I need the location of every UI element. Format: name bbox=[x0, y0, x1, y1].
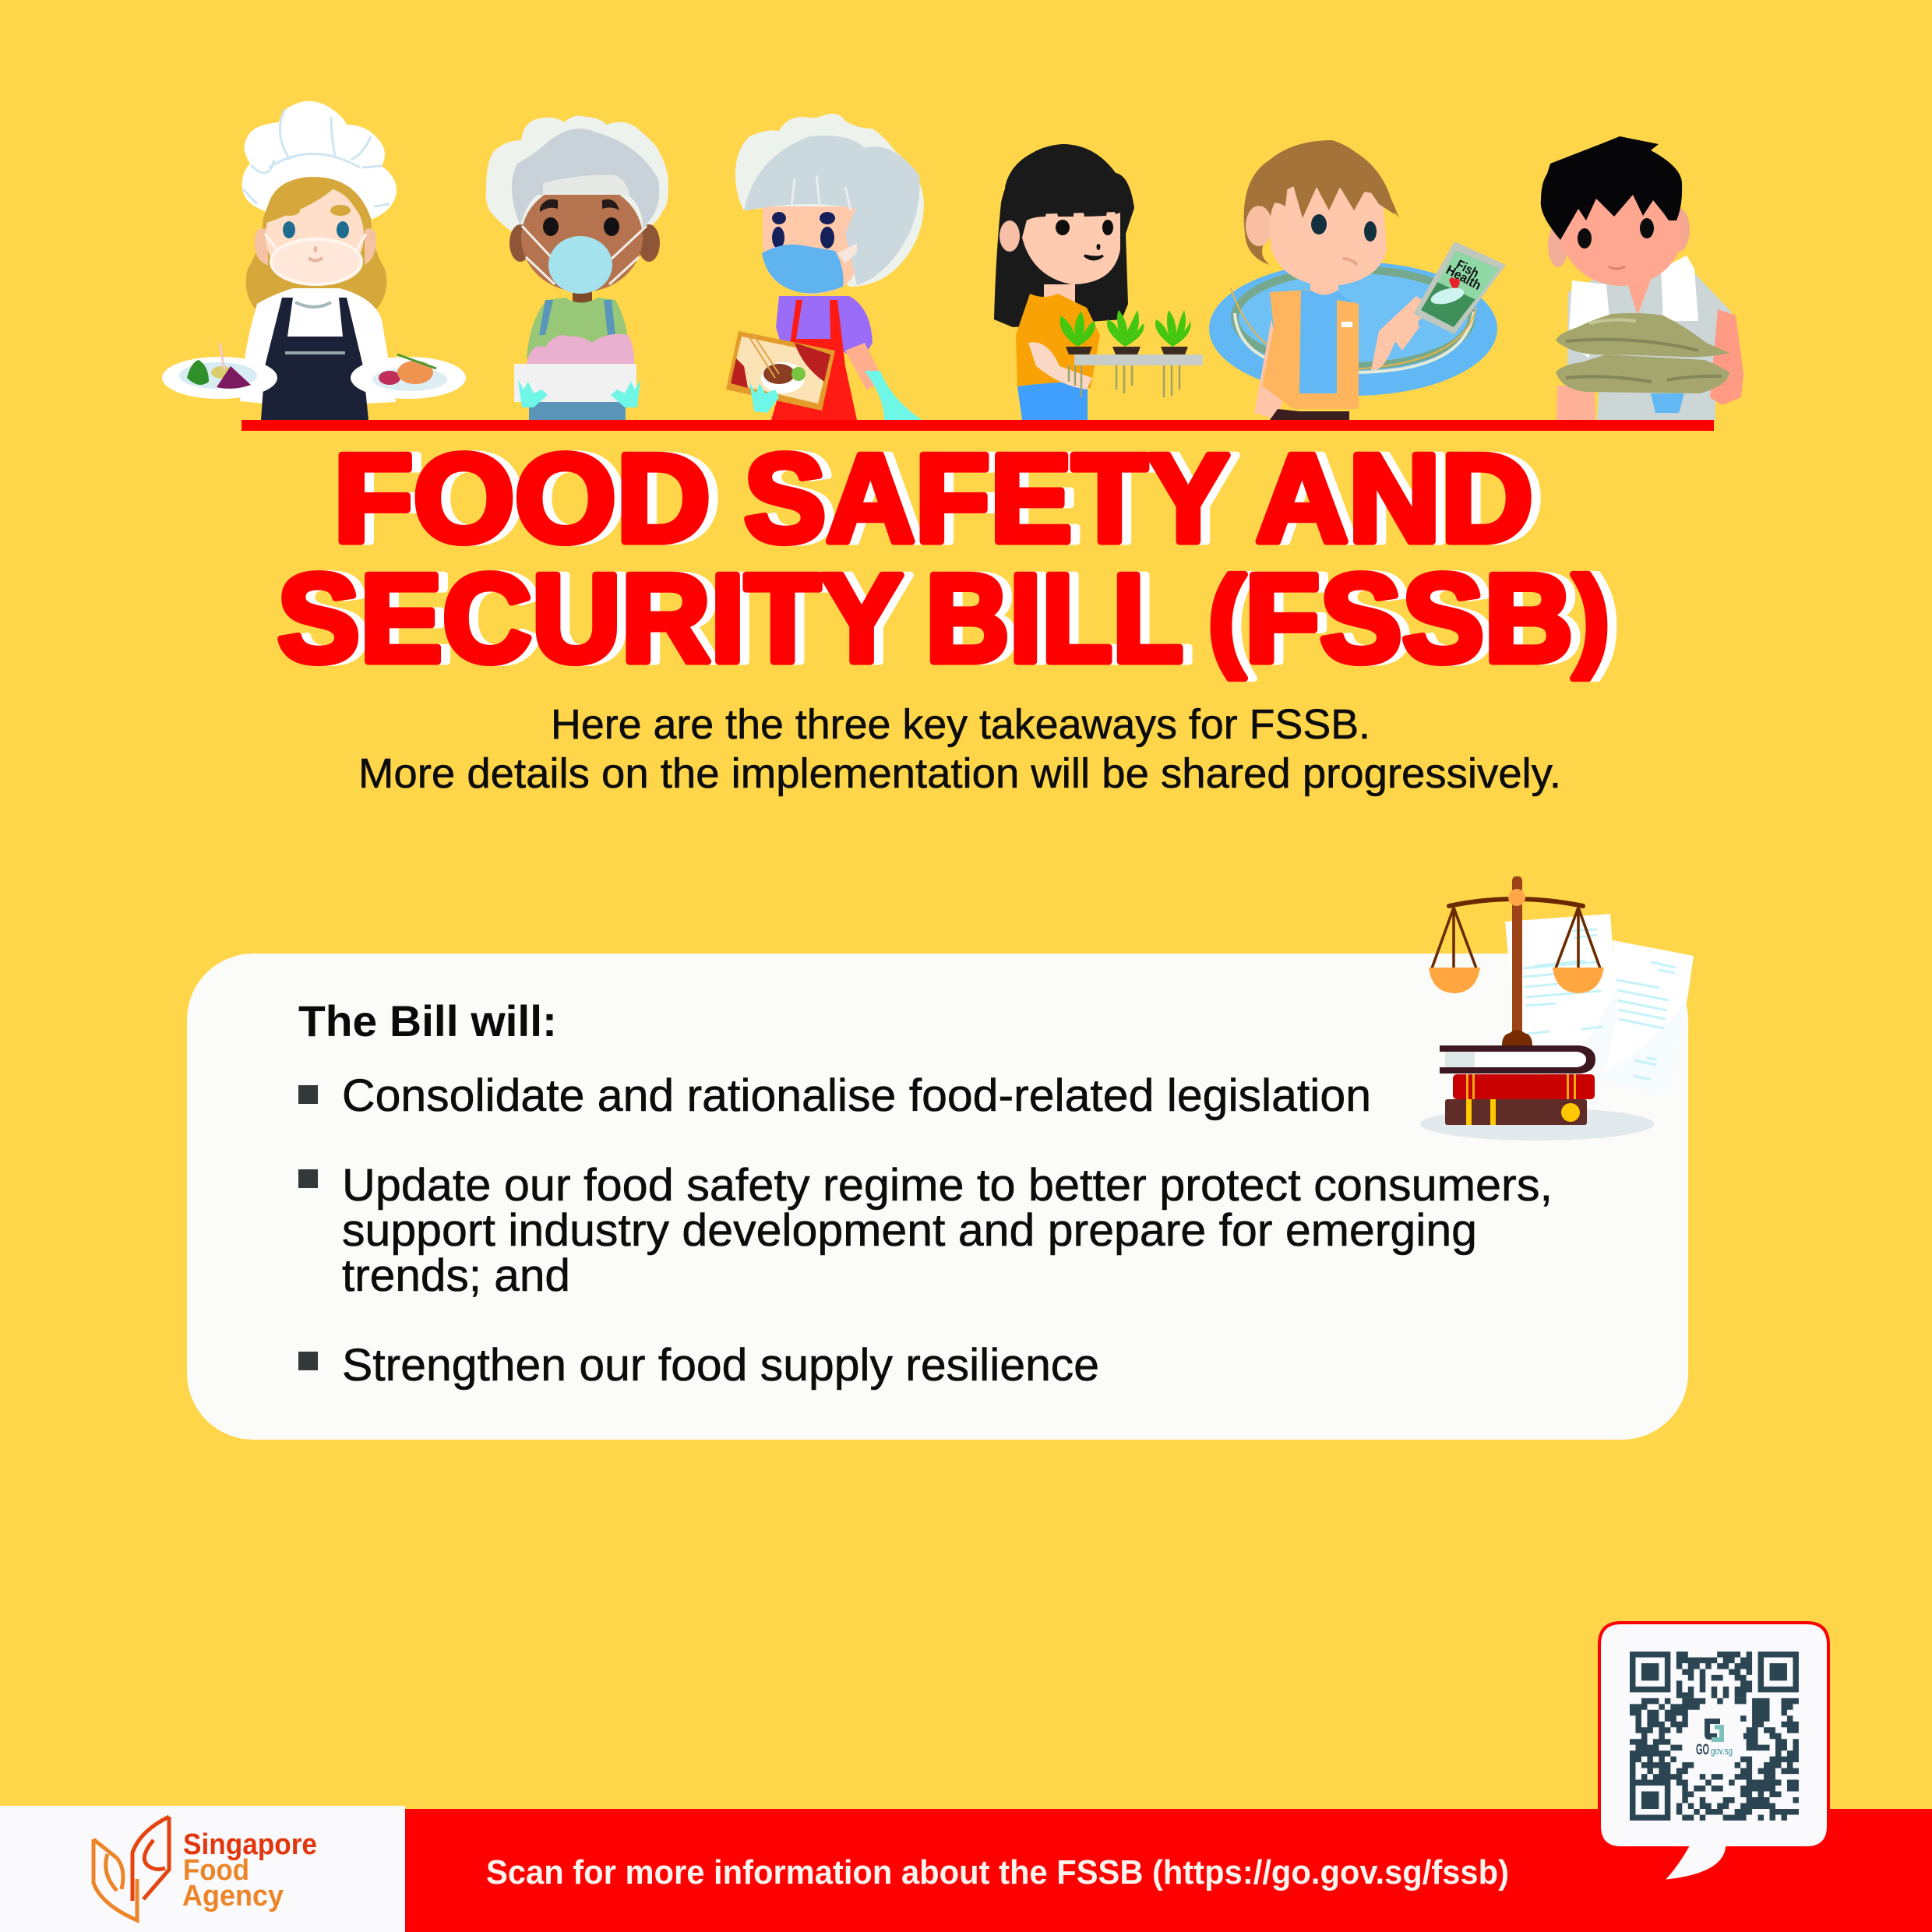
title line 1: FOOD bbox=[343, 428, 720, 569]
title line 1: SAFETY bbox=[744, 428, 1229, 569]
title line 2: SECURITY bbox=[277, 548, 903, 689]
icon: Singapore Food Agency leaf logo bbox=[93, 1817, 169, 1920]
footer logo panel bbox=[0, 1806, 405, 1932]
sacks bbox=[1556, 313, 1729, 357]
QR centre logo bbox=[1687, 1709, 1743, 1765]
bullet 3: Strengthen our food supply resilience bbox=[342, 1340, 1099, 1391]
title line 2: BILL bbox=[925, 548, 1183, 689]
character: fish farmer with tablet and pond bbox=[1209, 140, 1506, 420]
title line 2: SECURITY bbox=[287, 548, 912, 689]
logo wordmark: Agency bbox=[182, 1880, 284, 1913]
QR code bbox=[1630, 1652, 1799, 1821]
QR centre logo: GO bbox=[1696, 1742, 1709, 1758]
footer red band bbox=[405, 1809, 1932, 1932]
bubble outline and tail bbox=[1599, 1623, 1828, 1881]
heading: The Bill will: The Bill will: bbox=[298, 996, 557, 1045]
character: girl with hydroponic plants bbox=[994, 144, 1203, 420]
bullet list bbox=[298, 1070, 1553, 1391]
icon: scales of justice on books with papers bbox=[1420, 876, 1694, 1141]
tablet: Fish bbox=[1454, 257, 1482, 281]
logo wordmark: Food bbox=[183, 1854, 249, 1887]
bullet 2: trends; and bbox=[342, 1250, 570, 1301]
character: worker in mask holding poultry bbox=[486, 116, 668, 420]
footer text: Scan for more information about the FSSB (https://go.gov.sg/fssb) bbox=[486, 1853, 1509, 1891]
title line 2: ( bbox=[1208, 555, 1245, 679]
bullet 2: Update our food safety regime to better protect consumers, bbox=[342, 1160, 1553, 1211]
title line 2: FSSB bbox=[1254, 548, 1582, 689]
bullet 2: support industry development and prepare for emerging bbox=[342, 1205, 1477, 1256]
intro text: More details on the implementation will be shared progressively. bbox=[358, 750, 1561, 797]
QR centre logo: gov.sg bbox=[1711, 1745, 1733, 1757]
panel: the Bill will bbox=[187, 954, 1688, 1440]
title line 2: BILL bbox=[935, 548, 1193, 689]
bullet 1: Consolidate and rationalise food-related legislation bbox=[342, 1070, 1371, 1121]
character: food seller with menu bbox=[726, 114, 924, 420]
plate right bbox=[351, 354, 466, 399]
character: chef holding two plates bbox=[162, 101, 466, 420]
title line 2: ( bbox=[1218, 555, 1254, 679]
title line 2: ) bbox=[1582, 555, 1619, 679]
title bbox=[277, 428, 1619, 689]
title line 2: FSSB bbox=[1245, 548, 1573, 689]
title line 1: AND bbox=[1256, 428, 1533, 569]
title line 1: AND bbox=[1265, 428, 1542, 569]
tablet bbox=[1413, 242, 1506, 334]
bullet 2 bbox=[298, 1160, 1553, 1301]
tray with seedlings bbox=[1060, 310, 1203, 397]
red divider bar under characters bbox=[242, 420, 1714, 431]
QR speech bubble bbox=[1599, 1623, 1828, 1881]
apron bbox=[261, 298, 368, 420]
title line 1 bbox=[333, 428, 1542, 569]
title line 1: SAFETY bbox=[753, 428, 1239, 569]
tablet: Health bbox=[1444, 263, 1483, 293]
intro text: Here are the three key takeaways for FSSB. bbox=[551, 701, 1370, 748]
menu bbox=[726, 331, 835, 411]
plate left bbox=[162, 343, 277, 399]
title line 2 bbox=[277, 548, 1619, 689]
logo wordmark: Singapore bbox=[183, 1828, 317, 1861]
intro text bbox=[358, 701, 1561, 797]
logo wordmark bbox=[182, 1828, 317, 1913]
character: worker carrying rice sacks bbox=[1541, 136, 1743, 420]
title line 2: ) bbox=[1573, 555, 1609, 679]
title line 1: FOOD bbox=[333, 428, 710, 569]
illustration: six food workers bbox=[162, 101, 1743, 420]
